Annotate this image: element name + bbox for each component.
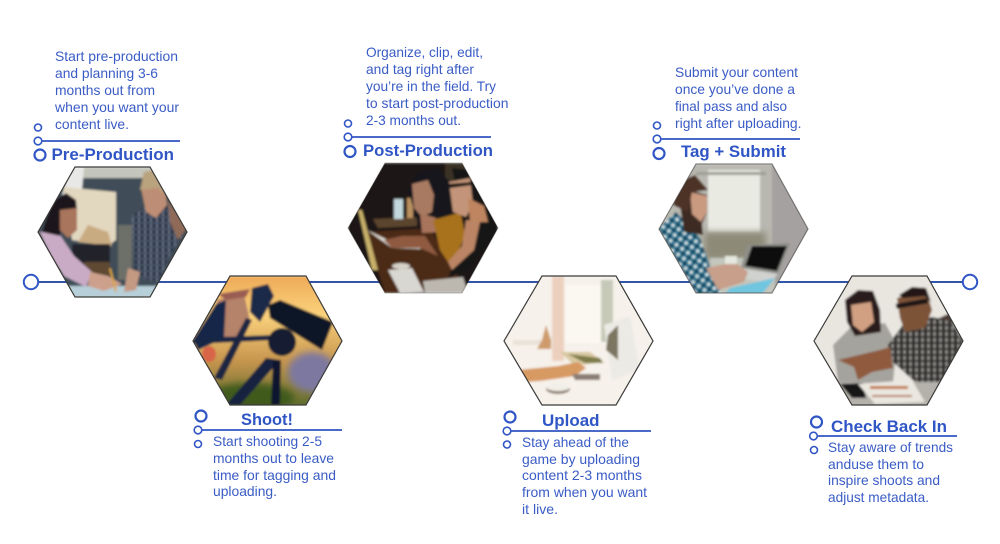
description: check back in xyxy=(828,440,953,505)
description: upload: it live. xyxy=(522,502,558,517)
description: upload: Stay ahead of the xyxy=(522,435,629,450)
timeline end marker xyxy=(963,275,977,289)
description: tag and submit: right after uploading. xyxy=(675,116,802,131)
step: tag and submit xyxy=(653,65,802,161)
bullet line: tag and submit xyxy=(653,122,800,159)
heading: pre-production: Pre-Production xyxy=(52,145,174,164)
bullet line: pre-production xyxy=(34,124,180,160)
timeline start marker xyxy=(24,275,38,289)
description: pre-production: and planning 3-6 xyxy=(55,66,158,81)
description: post-production: 2-3 months out. xyxy=(366,113,461,128)
photo hexagon: upload xyxy=(504,276,654,406)
description: tag and submit: Submit your content xyxy=(675,65,798,80)
description: pre-production xyxy=(54,49,179,132)
description: check back in: adjust metadata. xyxy=(828,490,929,505)
description: post-production xyxy=(366,45,508,128)
timeline xyxy=(24,275,977,289)
description: shoot: time for tagging and xyxy=(213,468,336,483)
bullet line: upload xyxy=(503,412,651,448)
description: tag and submit: final pass and also xyxy=(675,99,787,114)
description: pre-production: Start pre-production xyxy=(55,49,178,64)
bullet line: post-production xyxy=(344,120,491,157)
heading: upload: Upload xyxy=(542,411,600,430)
photo hexagon: pre-production xyxy=(38,167,188,298)
description: shoot: months out to leave xyxy=(213,451,334,466)
description: shoot xyxy=(213,434,336,499)
step: check back in xyxy=(810,416,957,505)
description: upload xyxy=(522,435,647,517)
description: pre-production: when you want your xyxy=(54,100,179,115)
step: shoot xyxy=(194,410,342,499)
description: check back in: Stay aware of trends xyxy=(828,440,953,455)
description: post-production: and tag right after xyxy=(366,62,474,77)
description: upload: content 2-3 months xyxy=(522,468,642,483)
step: pre-production xyxy=(34,49,180,164)
description: post-production: to start post-production xyxy=(366,96,508,111)
description: post-production: Organize, clip, edit, xyxy=(366,45,483,60)
description: upload: from when you want xyxy=(522,485,647,500)
bullet line: check back in xyxy=(810,416,957,454)
description: tag and submit: once you’ve done a xyxy=(675,82,795,97)
photo hexagon: check back in xyxy=(814,276,964,406)
heading: tag and submit: Tag + Submit xyxy=(681,142,786,161)
step: post-production xyxy=(344,45,508,160)
description: upload: game by uploading xyxy=(522,452,640,467)
photo hexagon: shoot xyxy=(192,276,343,413)
heading: check back in: Check Back In xyxy=(831,417,947,436)
step: upload xyxy=(503,411,651,517)
description: pre-production: months out from xyxy=(55,83,155,98)
description: check back in: anduse them to xyxy=(828,457,924,472)
bullet line: shoot xyxy=(194,410,342,448)
description: shoot: Start shooting 2-5 xyxy=(213,434,322,449)
description: check back in: inspire shoots and xyxy=(828,473,940,488)
description: pre-production: content live. xyxy=(55,117,129,132)
heading: post-production: Post-Production xyxy=(363,141,493,160)
description: post-production: you’re in the field. Try xyxy=(366,79,496,94)
description: tag and submit xyxy=(675,65,802,131)
description: shoot: uploading. xyxy=(213,484,277,499)
heading: shoot: Shoot! xyxy=(241,410,293,429)
photo hexagon: post-production xyxy=(348,163,498,293)
photo hexagon: tag and submit xyxy=(658,164,812,294)
